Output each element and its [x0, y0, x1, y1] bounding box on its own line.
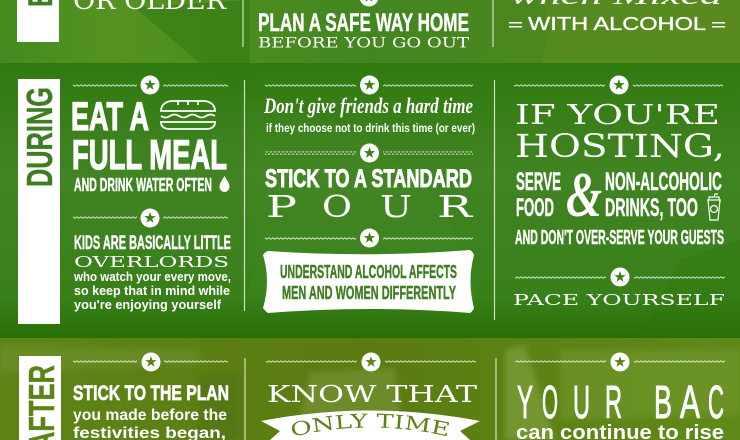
panel: during, right column — [513, 76, 725, 309]
divider star: before center — [360, 0, 378, 6]
panel: during, center column — [263, 76, 494, 320]
text: if they choose not to drink: if they choose not to drink this time (or ever) — [266, 123, 475, 135]
divider star: after center — [266, 352, 476, 372]
icon: cup — [707, 194, 721, 220]
heading: pour: O — [322, 190, 352, 225]
divider star: after left — [73, 352, 228, 372]
before label bar — [17, 0, 60, 42]
text: food: FOOD — [516, 194, 554, 222]
heading: full meal: FULL MEAL — [72, 131, 227, 178]
body text: plan: you made before the — [73, 407, 227, 424]
text: serve: SERVE — [516, 168, 561, 196]
text: before you go out: BEFORE YOU GO OUT — [258, 36, 469, 52]
divider star: after right — [515, 352, 725, 372]
during label bar: DURING — [19, 87, 60, 187]
body text: kids — [73, 269, 231, 312]
icon: sandwich — [161, 101, 215, 129]
heading: your bac: U — [573, 376, 590, 428]
text: with alcohol: WITH ALCOHOL — [528, 14, 706, 34]
panel: during, left column — [18, 76, 244, 324]
banner: alcohol affects men and women: UNDERSTAND ALCOHOL AFFECTS — [280, 261, 457, 282]
icon: water drop — [220, 176, 230, 192]
divider star: during center mid — [265, 144, 473, 162]
body text: kids: you're enjoying yourself — [74, 297, 222, 312]
heading: plan a safe way home: PLAN A SAFE WAY HOME — [258, 9, 469, 37]
divider star: during center top — [265, 76, 473, 94]
text: and drink water often: AND DRINK WATER OFTEN — [74, 175, 212, 195]
heading: your bac: B — [654, 376, 672, 428]
heading: hosting: HOSTING, — [515, 127, 725, 165]
during label bar — [18, 79, 60, 324]
heading: pace yourself: PACE YOURSELF — [513, 291, 725, 309]
divider star: during left top — [73, 76, 228, 94]
banner: alcohol affects men and women: MEN AND WOMEN DIFFERENTLY — [282, 282, 456, 303]
heading: pour: U — [380, 190, 412, 225]
script: don't give friends a hard time: Don't give friends a hard time — [263, 93, 473, 118]
body text: kids: who watch your every move, — [73, 269, 231, 284]
heading: if you're: IF YOU'RE — [515, 100, 720, 131]
divider star: during right lower — [515, 268, 725, 286]
body text: kids: so keep that in mind while — [74, 283, 230, 298]
divider star: during left lower — [73, 208, 228, 228]
text: overlords: OVERLORDS — [74, 253, 229, 271]
panel: after — [19, 352, 725, 440]
heading: your bac: A — [680, 376, 700, 428]
heading: kids are basically little: KIDS ARE BASICALLY LITTLE — [74, 232, 231, 254]
divider star: during center lower — [265, 228, 473, 248]
heading: your bac: R — [605, 376, 622, 428]
heading: your bac: O — [542, 376, 558, 428]
heading: pour: R — [437, 190, 474, 225]
icon: ampersand: & — [566, 159, 602, 230]
heading: stick to a standard: STICK TO A STANDARD — [265, 165, 472, 193]
heading: your bac — [517, 376, 724, 428]
panel: before — [17, 0, 725, 52]
heading: your bac: Y — [517, 376, 533, 428]
banner: alcohol affects men and women — [263, 250, 474, 313]
body text: plan — [73, 407, 227, 440]
heading: eat a: EAT A — [71, 95, 149, 139]
heading: know that: KNOW THAT — [267, 382, 478, 408]
heading: stick to the plan: STICK TO THE PLAN — [73, 382, 229, 405]
heading: pour — [266, 190, 474, 225]
divider star: during right top — [514, 76, 723, 94]
heading: pour: P — [266, 190, 297, 225]
